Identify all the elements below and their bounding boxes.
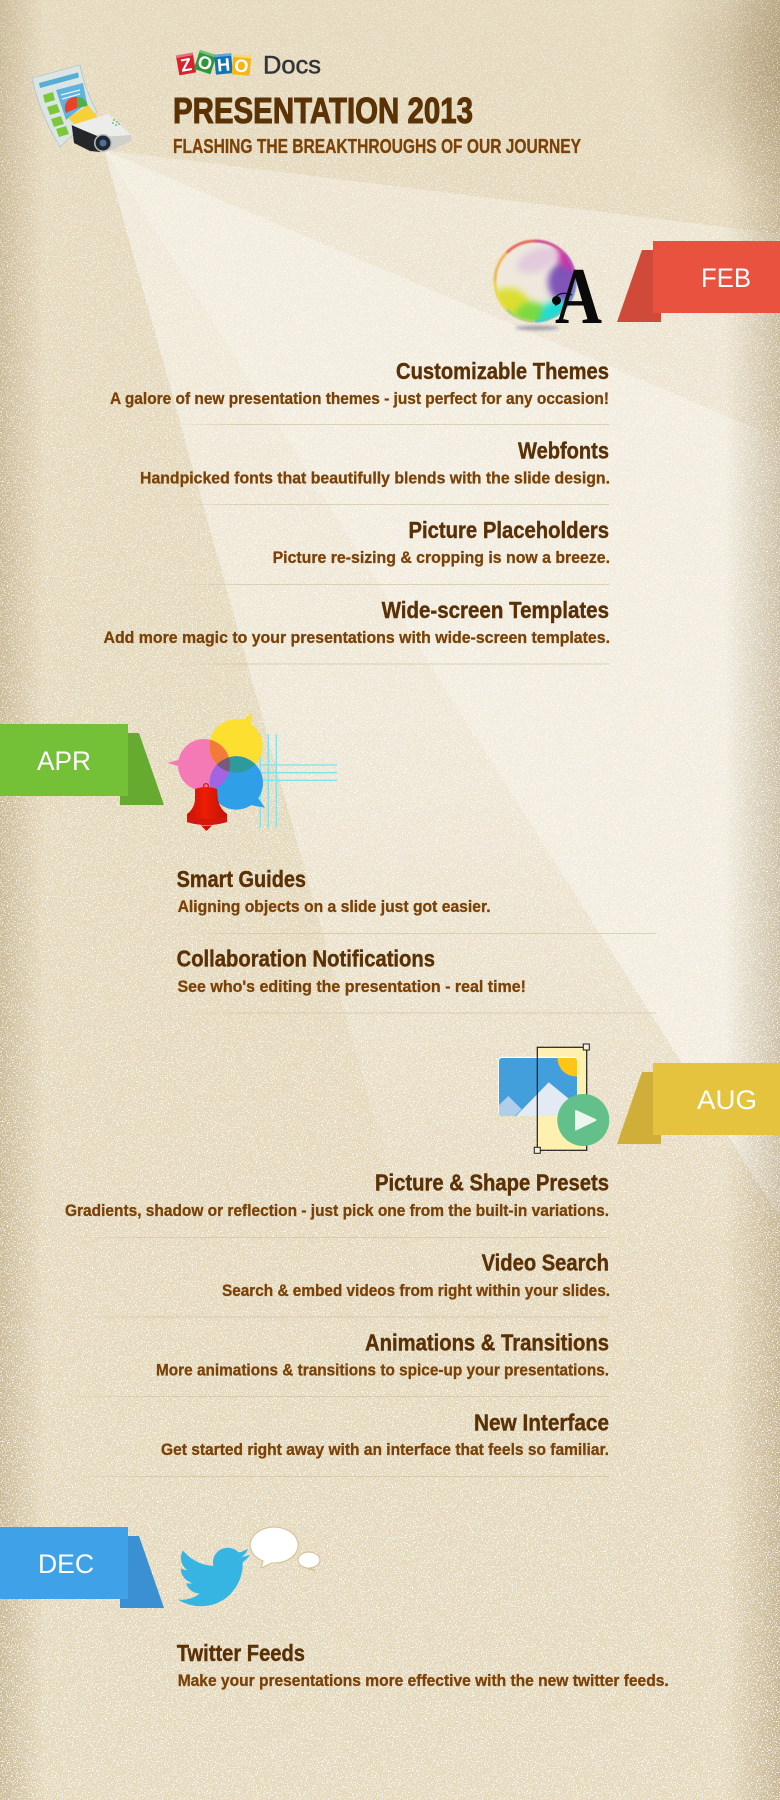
- feature: New Interface: [161, 1410, 609, 1459]
- subtitle: FLASHING THE BREAKTHROUGHS OF OUR JOURNEY: [173, 136, 582, 158]
- ribbon: APR: APR: [37, 746, 91, 776]
- description: More animations & transitions to spice-up your presentations.: [156, 1360, 609, 1380]
- icon: picture, shape handles and video play button: [498, 1040, 609, 1153]
- heading: Smart Guides: [177, 866, 306, 892]
- ribbon: DEC: DEC: [38, 1549, 94, 1579]
- heading: Wide-screen Templates: [382, 597, 609, 623]
- heading: Picture Placeholders: [408, 517, 609, 543]
- description: Picture re-sizing & cropping is now a breeze.: [273, 548, 610, 567]
- heading: Video Search: [482, 1250, 609, 1276]
- description: Make your presentations more effective with the new twitter feeds.: [178, 1671, 669, 1690]
- feature: Picture Placeholders: [273, 517, 610, 567]
- heading: New Interface: [474, 1410, 609, 1436]
- icon: colour bubble and letter A: A: [555, 253, 602, 341]
- description: Search & embed videos from right within your slides.: [222, 1281, 610, 1300]
- feature: Webfonts: [140, 438, 610, 488]
- logo tile O green: O: [195, 51, 215, 75]
- feature: Picture & Shape Presets: [65, 1170, 609, 1220]
- description: Get started right away with an interface that feels so familiar.: [161, 1440, 609, 1459]
- ribbon: APR: [0, 724, 164, 805]
- icon: presentation sheet and projector: [32, 65, 131, 152]
- feature: Customizable Themes: [110, 358, 609, 408]
- logo word Docs: Docs: [263, 52, 321, 80]
- feature: Video Search: [222, 1250, 610, 1300]
- description: Gradients, shadow or reflection - just pick one from the built-in variations.: [65, 1201, 609, 1220]
- logo tile Z: [176, 53, 196, 76]
- feature: Wide-screen Templates: [104, 597, 610, 647]
- feature: Animations & Transitions: [156, 1330, 609, 1380]
- heading: Webfonts: [518, 438, 609, 464]
- heading: Collaboration Notifications: [177, 946, 435, 972]
- logo tile Z: Z: [179, 54, 193, 76]
- icon: twitter bird with speech bubbles: [178, 1527, 320, 1606]
- heading: Animations & Transitions: [365, 1330, 609, 1356]
- feature: Collaboration Notifications: [177, 946, 526, 996]
- ribbon: AUG: [617, 1063, 780, 1144]
- ribbon: DEC: [0, 1527, 164, 1608]
- heading: Customizable Themes: [396, 358, 609, 384]
- heading: Picture & Shape Presets: [375, 1170, 609, 1196]
- heading: Twitter Feeds: [177, 1640, 305, 1666]
- icon: guides, overlapping speech bubbles and bell: [167, 712, 337, 831]
- description: See who's editing the presentation - real time!: [178, 977, 526, 996]
- ribbon: FEB: [617, 241, 780, 322]
- description: Add more magic to your presentations with wide-screen templates.: [104, 628, 610, 647]
- feature: Twitter Feeds: [177, 1640, 669, 1690]
- icon: colour bubble and letter A: [492, 238, 602, 332]
- ribbon: FEB: FEB: [701, 263, 751, 293]
- description: Aligning objects on a slide just got easier.: [178, 897, 491, 916]
- logo: Zoho Docs: [176, 50, 321, 80]
- logo tile H: H: [216, 54, 231, 75]
- title: PRESENTATION 2013: [173, 90, 473, 131]
- description: A galore of new presentation themes - just perfect for any occasion!: [110, 389, 609, 408]
- feature: Smart Guides: [177, 866, 491, 916]
- ribbon: AUG: AUG: [697, 1085, 757, 1115]
- logo tile O yellow: O: [234, 55, 249, 77]
- description: Handpicked fonts that beautifully blends with the slide design.: [140, 469, 610, 488]
